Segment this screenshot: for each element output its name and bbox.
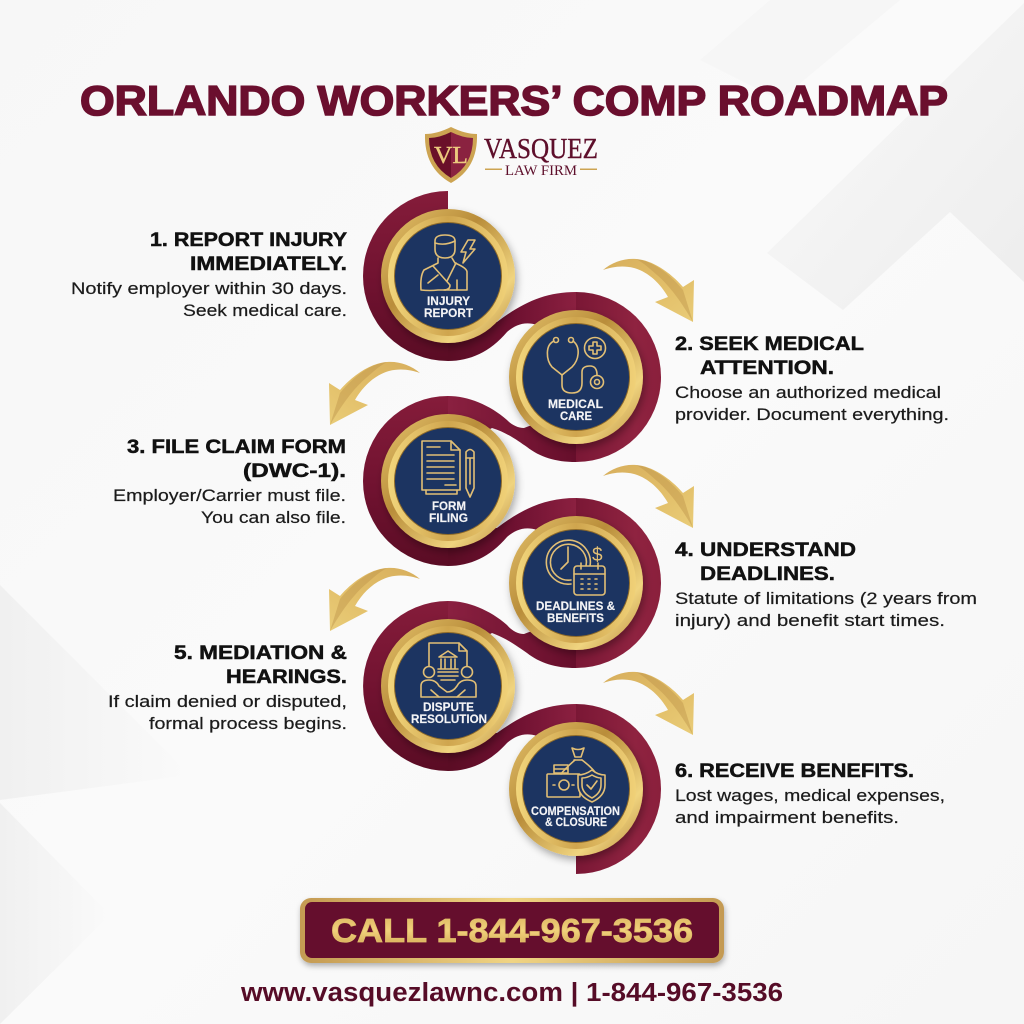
panel: step 2 text — [675, 333, 949, 424]
title: ORLANDO WORKERS’ COMP ROADMAP — [80, 77, 948, 124]
logo wordmark: VASQUEZ — [484, 134, 598, 165]
panel: step 1 text — [71, 229, 347, 320]
medallion: compensation and closure — [509, 722, 643, 856]
icon: injured worker — [421, 235, 475, 290]
label: DEADLINES & — [536, 601, 615, 613]
medallion: form filing — [381, 414, 515, 548]
icon: dollar sign: $ — [592, 545, 603, 566]
medallion: medical care: CARE — [560, 411, 592, 423]
medallion: injury report: REPORT — [424, 308, 473, 320]
medallion: dispute resolution: RESOLUTION — [411, 714, 487, 726]
heading: 1. REPORT INJURY — [150, 229, 347, 251]
heading: 5. MEDIATION & — [174, 642, 347, 664]
medallion: deadlines and benefits: BENEFITS — [547, 613, 604, 625]
arrow: step 3 to 4 — [603, 465, 694, 528]
label: MEDICAL — [548, 399, 603, 411]
panel: step 4 text: injury) and benefit start times. — [675, 612, 945, 630]
panel: step 6 text: and impairment benefits. — [675, 809, 899, 827]
label: DISPUTE — [423, 702, 474, 714]
heading: 4. UNDERSTAND — [675, 539, 856, 561]
body: Statute of limitations (2 years from — [675, 590, 977, 608]
logo subtitle: LAW FIRM — [505, 163, 577, 179]
panel: step 6 text — [675, 760, 945, 827]
arrow: step 1 to 2 — [603, 259, 694, 322]
heading: 6. RECEIVE BENEFITS. — [675, 760, 914, 782]
panel: step 5 text: HEARINGS. — [226, 666, 347, 688]
body: Employer/Carrier must file. — [113, 487, 346, 505]
label: INJURY — [427, 296, 470, 308]
body: If claim denied or disputed, — [108, 693, 347, 711]
medallion: compensation and closure: & CLOSURE — [545, 817, 607, 829]
icon: clock and calendar — [546, 540, 605, 595]
label: FORM — [432, 501, 466, 513]
arrow: step 4 to 5 — [329, 568, 420, 631]
panel: step 1 text: Seek medical care. — [183, 302, 347, 320]
website and phone: www.vasquezlawnc.com | 1-844-967-3536 — [240, 979, 783, 1007]
body: Lost wages, medical expenses, — [675, 787, 945, 805]
arrow: step 2 to 3 — [329, 362, 420, 425]
label: COMPENSATION — [531, 806, 620, 818]
ribbon path — [363, 191, 661, 874]
panel: step 2 text: provider. Document everything. — [675, 406, 949, 424]
panel: step 3 text: (DWC-1). — [243, 460, 346, 482]
heading: 2. SEEK MEDICAL — [675, 333, 864, 355]
panel: step 4 text: DEADLINES. — [700, 563, 835, 585]
medallion: medical care — [509, 310, 643, 444]
medallion: form filing: FILING — [429, 513, 468, 525]
medallion: injury report — [381, 209, 515, 343]
panel: step 5 text: formal process begins. — [149, 715, 347, 733]
medallion: dispute resolution — [381, 619, 515, 753]
panel: step 5 text — [108, 642, 347, 733]
panel: step 3 text — [113, 436, 346, 527]
call button: CALL 1-844-967-3536 — [331, 912, 693, 949]
call button — [300, 898, 724, 963]
panel: step 4 text — [675, 539, 977, 630]
body: Notify employer within 30 days. — [71, 280, 347, 298]
icon: money, bag and shield — [547, 748, 605, 802]
icon: VL shield: VL — [434, 143, 468, 169]
panel: step 2 text: ATTENTION. — [700, 357, 834, 379]
panel: step 3 text: You can also file. — [201, 509, 346, 527]
heading: 3. FILE CLAIM FORM — [127, 436, 346, 458]
icon: VL shield — [425, 127, 477, 183]
panel: step 1 text: IMMEDIATELY. — [190, 253, 347, 275]
body: Choose an authorized medical — [675, 384, 941, 402]
logo: Vasquez Law Firm — [425, 127, 598, 183]
icon: stethoscope — [547, 338, 606, 393]
icon: courthouse document and two people — [421, 643, 476, 697]
arrow: step 5 to 6 — [603, 672, 694, 735]
icon: form and pen — [422, 441, 474, 497]
medallion: deadlines and benefits — [509, 516, 643, 650]
